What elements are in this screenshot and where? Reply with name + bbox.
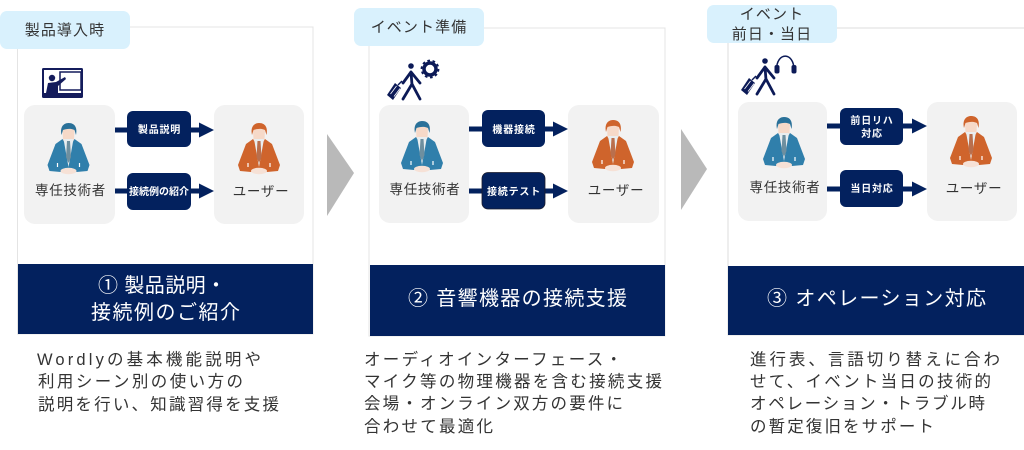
card: user [568, 105, 659, 223]
card: technician: 専任技術者 [750, 180, 820, 195]
description: step 1 [37, 350, 279, 414]
arrow with label: rehearsal support: 対応 [861, 127, 883, 140]
description: step 3: オペレーション・トラブル時 [750, 393, 985, 413]
description: step 3: 進行表、言語切り替えに合わ [750, 350, 1000, 369]
banner: step 3 title [728, 266, 1024, 335]
phase tab: event preparation: イベント準備 [371, 19, 467, 36]
description: step 3: せて、イベント当日の技術的 [750, 372, 991, 391]
arrow with label: connection test: 接続テスト [487, 185, 541, 198]
phase tab: day before and event day: イベント [740, 6, 804, 23]
icon: presentation screen [42, 68, 83, 98]
arrow with label: rehearsal support [827, 108, 927, 145]
description: step 2: 合わせて最適化 [364, 417, 493, 436]
phase tab: event preparation [354, 8, 484, 46]
arrow with label: device connection: 機器接続 [492, 123, 536, 136]
description: step 1: 利用シーン別の使い方の [38, 372, 243, 391]
arrow: step 1 to 2 [327, 134, 354, 216]
card: user [214, 105, 304, 224]
description: step 3: の暫定復旧をサポート [750, 417, 934, 436]
arrow with label: day-of support: 当日対応 [850, 182, 894, 195]
arrow with label: connection test [469, 172, 568, 209]
banner: step 1 title: ① 製品説明・ [98, 274, 226, 297]
arrow with label: connection examples: 接続例の紹介 [129, 185, 189, 198]
arrow with label: device connection [469, 110, 568, 147]
icon: traveler with gear [387, 60, 438, 100]
description: step 2: マイク等の物理機器を含む接続支援 [364, 372, 662, 391]
description: step 1: Wordlyの基本機能説明や [37, 350, 261, 369]
phase tab: product introduction [0, 11, 130, 49]
arrow: step 2 to 3 [681, 129, 707, 210]
description: step 2 [364, 349, 662, 436]
card: technician: 専任技術者 [35, 183, 106, 198]
card: user: ユーザー [233, 184, 289, 199]
panel: step 2 [354, 8, 665, 336]
arrow with label: rehearsal support: 前日リハ [850, 114, 894, 127]
description: step 2: オーディオインターフェース・ [364, 349, 622, 369]
phase tab: product introduction: 製品導入時 [25, 22, 105, 39]
card: technician [379, 105, 469, 223]
description: step 3 [750, 350, 1000, 436]
description: step 1: 説明を行い、知識習得を支援 [38, 395, 279, 414]
card: technician: 専任技術者 [390, 182, 460, 197]
banner: step 2 title: ② 音響機器の接続支援 [408, 287, 627, 310]
description: step 2: 会場・オンライン双方の要件に [364, 394, 623, 413]
arrow with label: connection examples [115, 173, 214, 210]
banner: step 3 title: ③ オペレーション対応 [767, 287, 986, 310]
banner: step 2 title [370, 265, 665, 336]
arrow with label: product explanation: 製品説明 [138, 123, 181, 136]
card: user [927, 102, 1017, 221]
icon: traveler with headphones [741, 56, 796, 95]
banner: step 1 title [18, 264, 313, 334]
card: technician [738, 102, 827, 221]
card: user: ユーザー [946, 181, 1002, 196]
arrow with label: product explanation [115, 111, 214, 147]
card: user: ユーザー [588, 183, 644, 198]
banner: step 1 title: 接続例のご紹介 [91, 301, 240, 324]
panel: step 1 [0, 11, 313, 334]
phase tab: day before and event day [707, 5, 837, 43]
card: technician [24, 105, 115, 224]
arrow with label: day-of support [827, 170, 927, 207]
panel: step 3 [707, 5, 1024, 335]
phase tab: day before and event day: 前日・当日 [732, 26, 812, 43]
